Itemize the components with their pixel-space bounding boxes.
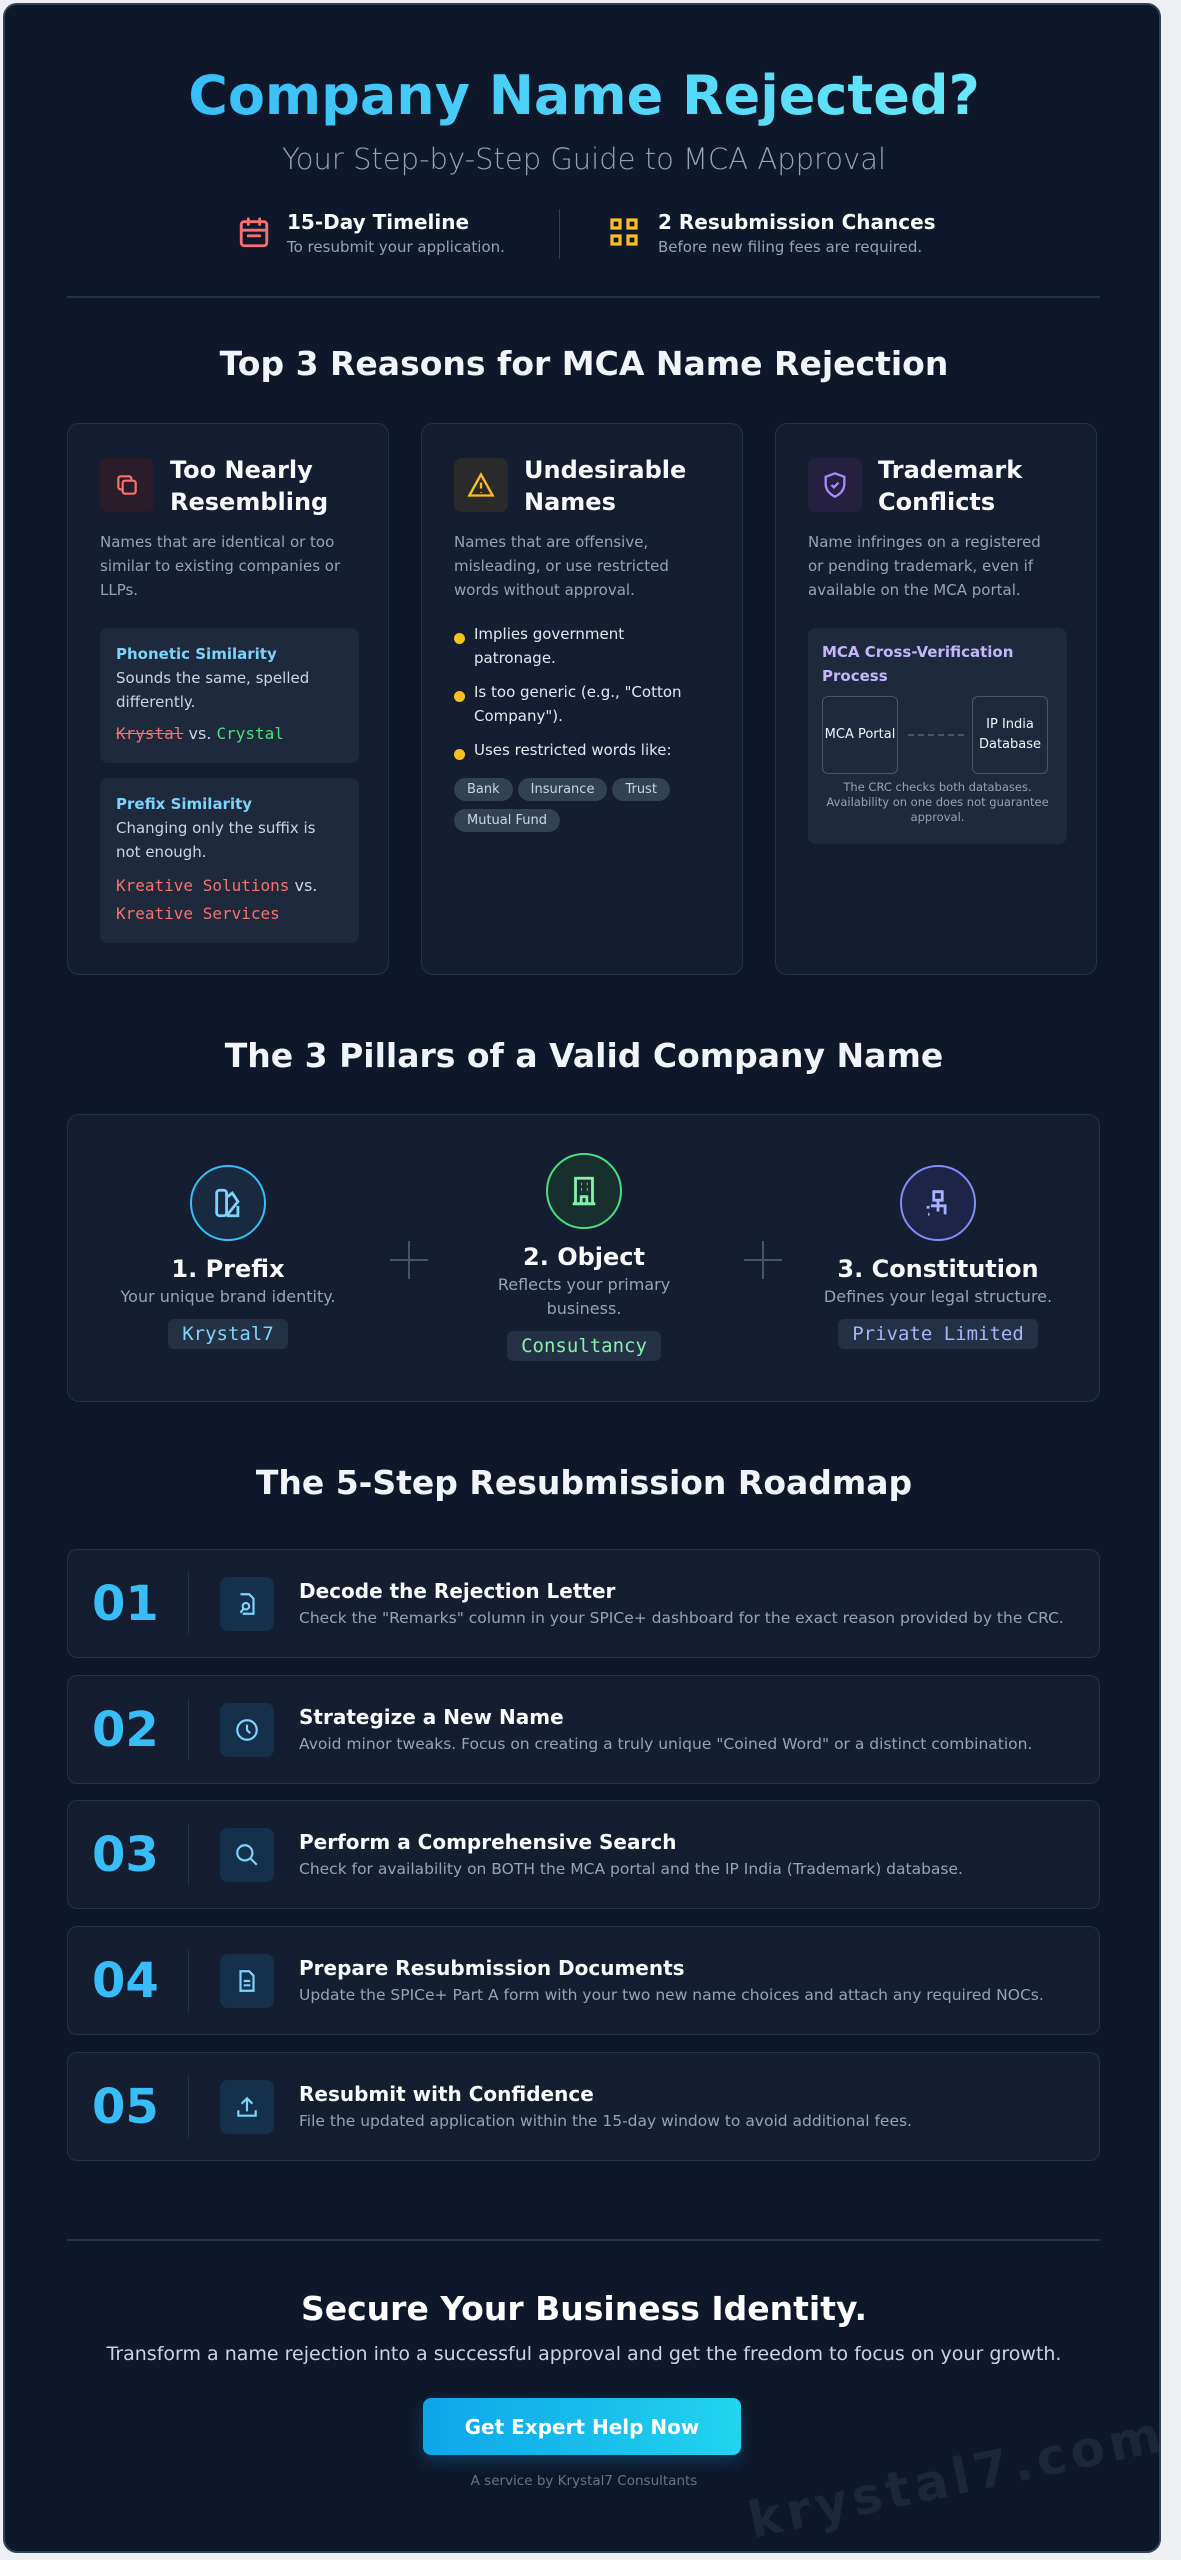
icon: shield — [808, 458, 862, 512]
icon: grid — [610, 218, 638, 246]
step 5 — [67, 2052, 1100, 2161]
diagram: cross-verification: IP India — [986, 717, 1034, 732]
step 3: Perform a Comprehensive Search — [299, 1830, 676, 1854]
step 3: 03 — [92, 1827, 159, 1883]
step 5: Resubmit with Confidence — [299, 2082, 594, 2106]
step 5: File the updated application within the 15-day window to avoid additional fees. — [299, 2112, 912, 2130]
diagram: cross-verification: MCA Portal — [825, 727, 895, 742]
button: get expert help: Get Expert Help Now — [465, 2414, 699, 2438]
footer heading: Secure Your Business Identity. — [301, 2289, 867, 2328]
step 1: Check the "Remarks" column in your SPICe+ dashboard for the exact reason provided by the CRC. — [299, 1609, 1064, 1627]
panel: undesirable names: Is too generic (e.g., "Cotton Company"). — [474, 683, 682, 725]
step 4 — [67, 1926, 1100, 2035]
icon: warning — [454, 458, 508, 512]
footer text: Transform a name rejection into a successful approval and get the freedom to focus on your growth. — [106, 2343, 1061, 2365]
pillar: object: Reflects your primary — [498, 1275, 670, 1294]
panel: undesirable names: Names — [524, 488, 616, 516]
tags: Insurance — [531, 782, 594, 797]
step 2: 02 — [92, 1702, 159, 1758]
icon: file search — [220, 1577, 274, 1631]
panel: undesirable names: Names that are offensive, misleading, or use restricted words without approval. — [454, 533, 669, 599]
icon: search — [220, 1828, 274, 1882]
button: get expert help — [423, 2398, 741, 2455]
icon: plus — [744, 1241, 782, 1279]
panel: trademark conflicts: Name infringes on a registered or pending trademark, even if available on the MCA portal. — [808, 533, 1041, 599]
panel: trademark conflicts: Trademark — [878, 456, 1022, 484]
panel: too nearly resembling: Resembling — [170, 488, 328, 516]
step 4: Prepare Resubmission Documents — [299, 1956, 685, 1980]
icon: prefix circle — [190, 1165, 266, 1241]
stat: 15-day timeline — [240, 210, 505, 256]
step 4: Update the SPICe+ Part A form with your two new name choices and attach any required NOCs. — [299, 1986, 1044, 2004]
panel: too nearly resembling: Names that are identical or too similar to existing companies or LLPs. — [100, 533, 340, 599]
panel: trademark conflicts — [775, 423, 1097, 975]
panel: trademark conflicts: Conflicts — [878, 488, 995, 516]
panel: undesirable names: Uses restricted words like: — [474, 741, 672, 759]
subtitle: Your Step-by-Step Guide to MCA Approval — [282, 142, 886, 176]
credit: A service by Krystal7 Consultants — [471, 2473, 697, 2489]
step 2: Avoid minor tweaks. Focus on creating a truly unique "Coined Word" or a distinct combination. — [299, 1735, 1032, 1753]
pillar: constitution: 3. Constitution — [837, 1255, 1039, 1283]
step 3: Check for availability on BOTH the MCA portal and the IP India (Trademark) database. — [299, 1860, 963, 1878]
step 4: 04 — [92, 1953, 159, 2009]
pillar: object — [498, 1153, 670, 1361]
pillar: prefix: Krystal7 — [182, 1323, 274, 1345]
stat divider — [559, 209, 560, 259]
title: Company Name Rejected? — [188, 64, 980, 127]
heading: 3 pillars: The 3 Pillars of a Valid Company Name — [225, 1036, 943, 1075]
pillar: constitution — [824, 1165, 1052, 1349]
icon: clock — [220, 1703, 274, 1757]
callout: prefix similarity: Kreative Solutions vs. — [116, 876, 317, 895]
callout: phonetic similarity: Phonetic Similarity — [116, 645, 277, 663]
step 1: 01 — [92, 1576, 159, 1632]
pillar: constitution: Defines your legal structure. — [824, 1287, 1052, 1306]
pillar: constitution: Private Limited — [852, 1323, 1024, 1345]
pillar: prefix: 1. Prefix — [171, 1255, 285, 1283]
panel: undesirable names: Undesirable — [524, 456, 686, 484]
pillar: prefix — [120, 1165, 335, 1349]
diagram: cross-verification: Database — [979, 737, 1041, 752]
step 1 — [67, 1549, 1100, 1658]
stat: resubmission chances: Before new filing fees are required. — [658, 238, 922, 256]
diagram: cross-verification: MCA Cross-Verification Process — [822, 643, 1013, 685]
stat: resubmission chances — [610, 210, 936, 256]
icon: plus — [390, 1241, 428, 1279]
icon: document — [220, 1954, 274, 2008]
callout: prefix similarity: Kreative Services — [116, 904, 280, 923]
step 2: Strategize a New Name — [299, 1705, 564, 1729]
step 1: Decode the Rejection Letter — [299, 1579, 615, 1603]
panel: pillars — [67, 1114, 1100, 1402]
tags — [454, 778, 670, 832]
callout: phonetic similarity: Krystal vs. Crystal — [116, 724, 284, 743]
icon: calendar — [240, 217, 268, 248]
callout: prefix similarity — [100, 778, 359, 943]
step 3 — [67, 1800, 1100, 1909]
stat: 15-day timeline: 15-Day Timeline — [287, 210, 469, 234]
tags: Trust — [625, 782, 657, 797]
panel: too nearly resembling: Too Nearly — [170, 456, 313, 484]
watermark: krystal7.com — [743, 2405, 1161, 2550]
diagram: cross-verification — [808, 628, 1067, 844]
heading: roadmap: The 5-Step Resubmission Roadmap — [256, 1463, 912, 1502]
pillar: object: 2. Object — [523, 1243, 645, 1271]
icon: copy — [100, 458, 154, 512]
icon: building circle — [546, 1153, 622, 1229]
pillar: object: Consultancy — [521, 1335, 647, 1357]
diagram: cross-verification: The CRC checks both databases. Availability on one does not guarantee approval. — [826, 780, 1049, 824]
pillar: object: business. — [547, 1299, 621, 1318]
callout: phonetic similarity — [100, 628, 359, 763]
callout: prefix similarity: Changing only the suffix is not enough. — [116, 819, 316, 861]
stat: resubmission chances: 2 Resubmission Chances — [658, 210, 936, 234]
stat: 15-day timeline: To resubmit your application. — [287, 238, 505, 256]
icon: constitution circle — [900, 1165, 976, 1241]
callout: prefix similarity: Prefix Similarity — [116, 795, 252, 813]
panel: undesirable names — [421, 423, 743, 975]
heading: top 3 reasons: Top 3 Reasons for MCA Name Rejection — [220, 344, 948, 383]
step 5: 05 — [92, 2079, 159, 2135]
tags: Mutual Fund — [467, 813, 547, 828]
panel: too nearly resembling — [67, 423, 389, 975]
tags: Bank — [467, 782, 500, 797]
callout: phonetic similarity: Sounds the same, spelled differently. — [116, 669, 309, 711]
step 2 — [67, 1675, 1100, 1784]
icon: upload — [220, 2080, 274, 2134]
pillar: prefix: Your unique brand identity. — [121, 1287, 335, 1306]
bullet list: Implies government patronage. — [474, 625, 624, 667]
